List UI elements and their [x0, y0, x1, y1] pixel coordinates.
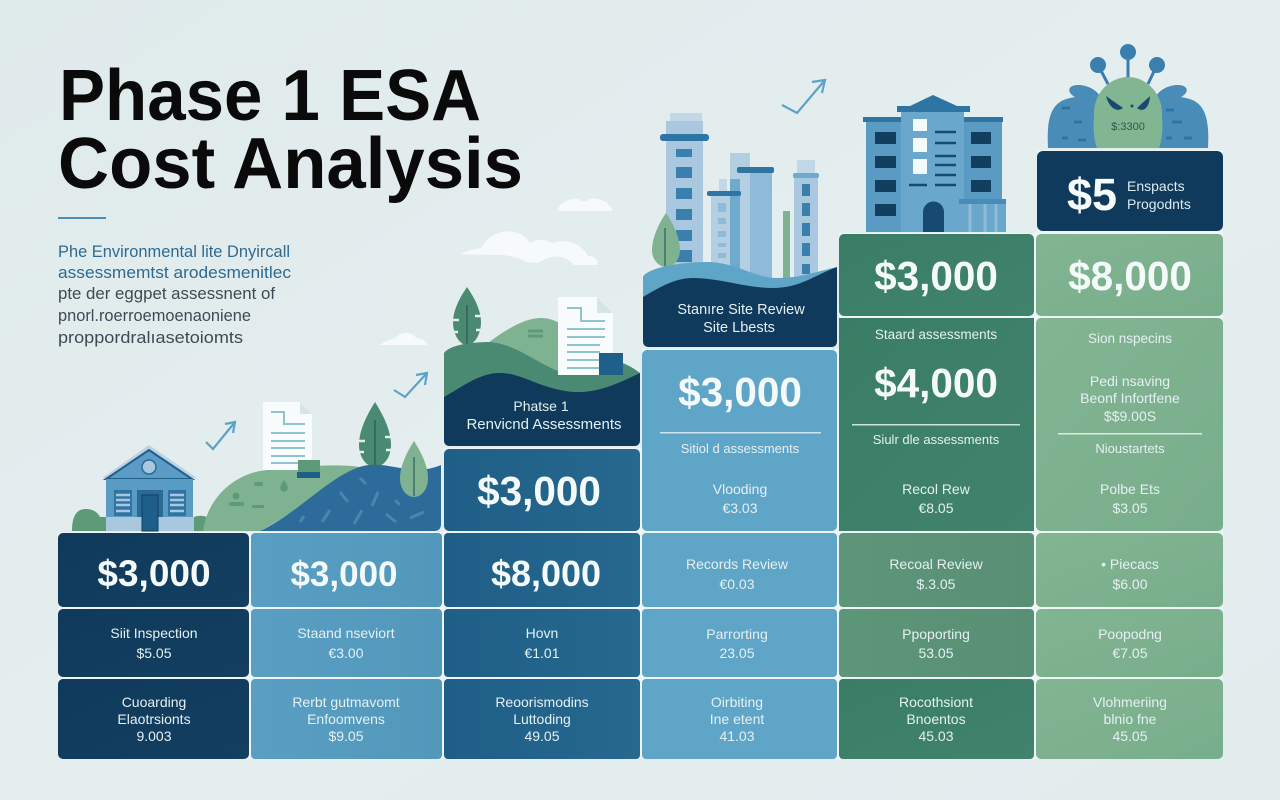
header text	[466, 398, 622, 433]
column 3: Hovn	[526, 625, 558, 641]
title: Cost Analysis	[58, 124, 523, 204]
panel: column 4 mid	[642, 350, 837, 531]
intro paragraph: pte der eggpet assessnent of	[58, 285, 275, 303]
column 1: $5.05	[136, 645, 172, 661]
icon: green hill	[203, 465, 360, 531]
sack texture	[1062, 108, 1192, 140]
column 5: Recoal Review	[889, 556, 984, 572]
panel: column 6 mid: Nioustartets	[1095, 441, 1165, 456]
header text	[677, 302, 805, 336]
column 6: • Piecacs	[1101, 556, 1159, 572]
intro paragraph	[58, 243, 291, 347]
tower 1	[660, 113, 709, 271]
icon: document	[558, 297, 613, 375]
panel: column 4 mid: €3.03	[722, 500, 758, 516]
icon: shrubs	[72, 509, 225, 531]
header text: Site Lbests	[703, 320, 775, 336]
panel: phase 1 header	[444, 287, 640, 446]
panel: column 6 top price	[1036, 234, 1223, 316]
icon: house	[102, 445, 197, 531]
column 2: Rerbt gutmavomt	[292, 694, 400, 710]
cell gap backing	[58, 150, 1223, 759]
column 4: 23.05	[719, 645, 755, 661]
column 2: Enfoomvens	[307, 711, 385, 727]
icon: light tree	[400, 441, 428, 497]
column 4: Records Review	[686, 556, 789, 572]
tree	[652, 213, 680, 267]
icon: light hill	[488, 318, 570, 380]
icon: small green box	[297, 460, 320, 478]
arrow: checkmark 1	[206, 422, 235, 449]
column 5: Rocothsiont	[899, 694, 973, 710]
panel: $5 callout: Enspacts	[1127, 178, 1185, 194]
column 1: Siit Inspection	[110, 625, 198, 641]
column 4: Oirbiting	[711, 694, 763, 710]
column 6: Vlohmeriing	[1093, 694, 1167, 710]
panel: column 6 top price: $8,000	[1068, 253, 1192, 299]
icon: dark hill	[444, 342, 640, 446]
panel: column 5 mid: Staard assessments	[875, 327, 997, 342]
icon: blue box	[599, 353, 623, 375]
table: bottom rows	[58, 533, 1223, 759]
panel: column 3 price: $3,000	[477, 468, 601, 514]
panel: $5 callout: $5	[1067, 169, 1117, 220]
column 1: Cuoarding	[122, 694, 186, 710]
navy wave	[444, 373, 640, 446]
column 5: Bnoentos	[906, 711, 966, 727]
column 4: €0.03	[719, 576, 755, 592]
column 6: 45.05	[1112, 728, 1148, 744]
panel: column 5 mid	[839, 318, 1034, 531]
column 2	[251, 533, 442, 759]
column 4: Parrorting	[706, 626, 768, 642]
panel: column 6 mid: $$9.00S	[1104, 408, 1156, 424]
column 6: €7.05	[1112, 645, 1148, 661]
panel: column 6 mid: Sion nspecins	[1088, 331, 1172, 346]
panel: $5 callout: Progodnts	[1127, 196, 1191, 212]
icon: tree on hill	[453, 287, 481, 345]
header text: Phatse 1	[513, 398, 569, 414]
panel: column 6 mid: Pedi nsaving	[1090, 373, 1170, 389]
column 5: Ppoporting	[902, 626, 970, 642]
column 1: $3,000	[97, 553, 211, 594]
column 6: $6.00	[1112, 576, 1148, 592]
eyes	[1106, 96, 1150, 110]
panel: column 6 mid: $3.05	[1112, 500, 1148, 516]
column 2: Staand nseviort	[297, 625, 395, 641]
icon: blue hill	[260, 465, 441, 531]
header text: Stanıre Site Review	[677, 302, 805, 318]
icon: small cloud	[380, 333, 427, 345]
panel: column 5 mid: €8.05	[918, 500, 954, 516]
panel: site review header	[643, 262, 837, 347]
panel: column 5 mid: $4,000	[874, 360, 998, 406]
intro paragraph: proppordralıasetoiomts	[58, 329, 243, 347]
navy wave	[643, 267, 837, 347]
icon: creature	[1048, 44, 1208, 148]
panel: column 6 mid: Polbe Ets	[1100, 481, 1160, 497]
icon: large cloud	[461, 231, 598, 265]
tower 4	[793, 160, 819, 280]
intro paragraph: Phe Environmental lite Dnyircall	[58, 243, 290, 261]
intro paragraph: assessmemtst arodesmenitlec	[58, 264, 291, 282]
column 4: Ine etent	[710, 711, 764, 727]
header text: Renvicnd Assessments	[466, 416, 622, 433]
column 3: €1.01	[524, 645, 560, 661]
icon: document	[263, 402, 312, 470]
antennae	[1090, 44, 1165, 84]
column 3: $8,000	[491, 553, 601, 594]
icon: towers	[652, 113, 819, 282]
column 6	[1036, 533, 1223, 759]
icon: office building	[863, 95, 1006, 232]
column 5: 45.03	[918, 728, 954, 744]
light wave	[643, 262, 837, 300]
column 6: Poopodng	[1098, 626, 1162, 642]
panel: column 4 mid: $3,000	[678, 369, 802, 415]
icon: dark tree	[359, 402, 391, 467]
column 2: $3,000	[290, 555, 398, 594]
panel: column 5 top price	[839, 234, 1034, 316]
panel: column 5 mid: Recol Rew	[902, 481, 971, 497]
panel: $5 callout	[1037, 151, 1223, 231]
panel: column 6 mid	[1036, 318, 1223, 531]
column 3: Luttoding	[513, 711, 571, 727]
column 5: 53.05	[918, 645, 954, 661]
column 3	[444, 533, 640, 759]
column 4: 41.03	[719, 728, 755, 744]
panel: column 5 mid: Siulr dle assessments	[873, 432, 1000, 447]
scene: house, hills, document and trees	[72, 402, 441, 531]
column 2: €3.00	[328, 645, 364, 661]
panel: column 4 mid: Sitiol d assessments	[681, 441, 800, 456]
column 1: 9.003	[136, 728, 172, 744]
panel: column 5 top price: $3,000	[874, 253, 998, 299]
green post	[783, 211, 790, 281]
column 5	[839, 533, 1034, 759]
arrow: checkmark 2	[394, 373, 427, 397]
tower 2	[707, 179, 741, 273]
title	[58, 56, 523, 204]
creature label: $:3300	[1111, 121, 1145, 133]
panel: column 3 price	[444, 449, 640, 531]
title: Phase 1 ESA	[59, 56, 481, 136]
column 5: $.3.05	[917, 576, 956, 592]
sacks	[1048, 85, 1208, 148]
column 1	[58, 533, 249, 759]
column 3: Reoorismodins	[495, 694, 589, 710]
intro paragraph: pnorl.roerroemoenaoniene	[58, 307, 251, 325]
tower 3	[730, 153, 774, 282]
column 2: $9.05	[328, 728, 364, 744]
column 3: 49.05	[524, 728, 560, 744]
head	[1094, 77, 1162, 148]
arrow: checkmark 3	[782, 80, 825, 113]
panel: column 6 mid: Beonf Infortfene	[1080, 390, 1180, 406]
column 6: blnio fne	[1104, 711, 1157, 727]
column 4	[642, 533, 837, 759]
panel: column 4 mid: Vlooding	[713, 481, 767, 497]
column 1: Elaotrsionts	[117, 711, 191, 727]
icon: cloud	[558, 199, 612, 211]
